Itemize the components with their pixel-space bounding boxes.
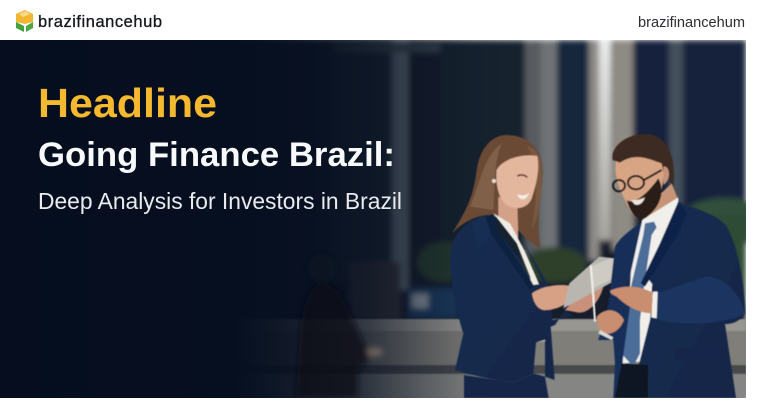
faint background pedestrian: [296, 286, 384, 398]
neck: [498, 197, 518, 238]
blue kiosk: [408, 288, 458, 318]
hand: [532, 285, 577, 310]
jacket: [450, 214, 573, 383]
brand name: brazifinancehub: [38, 13, 162, 31]
jacket: [598, 222, 642, 398]
woman: [450, 135, 603, 398]
face: [496, 155, 538, 208]
glasses: [613, 170, 662, 191]
man: [597, 134, 745, 398]
plaza steps: [225, 319, 746, 398]
trousers: [464, 373, 549, 398]
neck: [643, 183, 678, 227]
header: right site name: brazifinancehum: [638, 15, 745, 31]
trousers: [615, 363, 648, 398]
trees: [416, 241, 452, 284]
cuff and hands: [651, 292, 658, 318]
shirt: [623, 197, 678, 363]
people, drawn in zoomed coordinates: [450, 134, 745, 398]
blouse: [493, 213, 549, 343]
document: [562, 256, 614, 322]
headline block: [38, 80, 402, 214]
dark gradient overlay: [0, 40, 486, 398]
icon: logo cube: [16, 10, 33, 32]
tie: [623, 222, 657, 367]
hair: [612, 134, 674, 187]
hair back: [452, 135, 543, 248]
main title: Going Finance Brazil:: [38, 136, 395, 174]
city background: [256, 40, 746, 398]
head: [615, 155, 664, 218]
header: logo: [16, 10, 162, 32]
headline label: Headline: [38, 80, 217, 126]
subtitle: Deep Analysis for Investors in Brazil: [38, 188, 402, 214]
